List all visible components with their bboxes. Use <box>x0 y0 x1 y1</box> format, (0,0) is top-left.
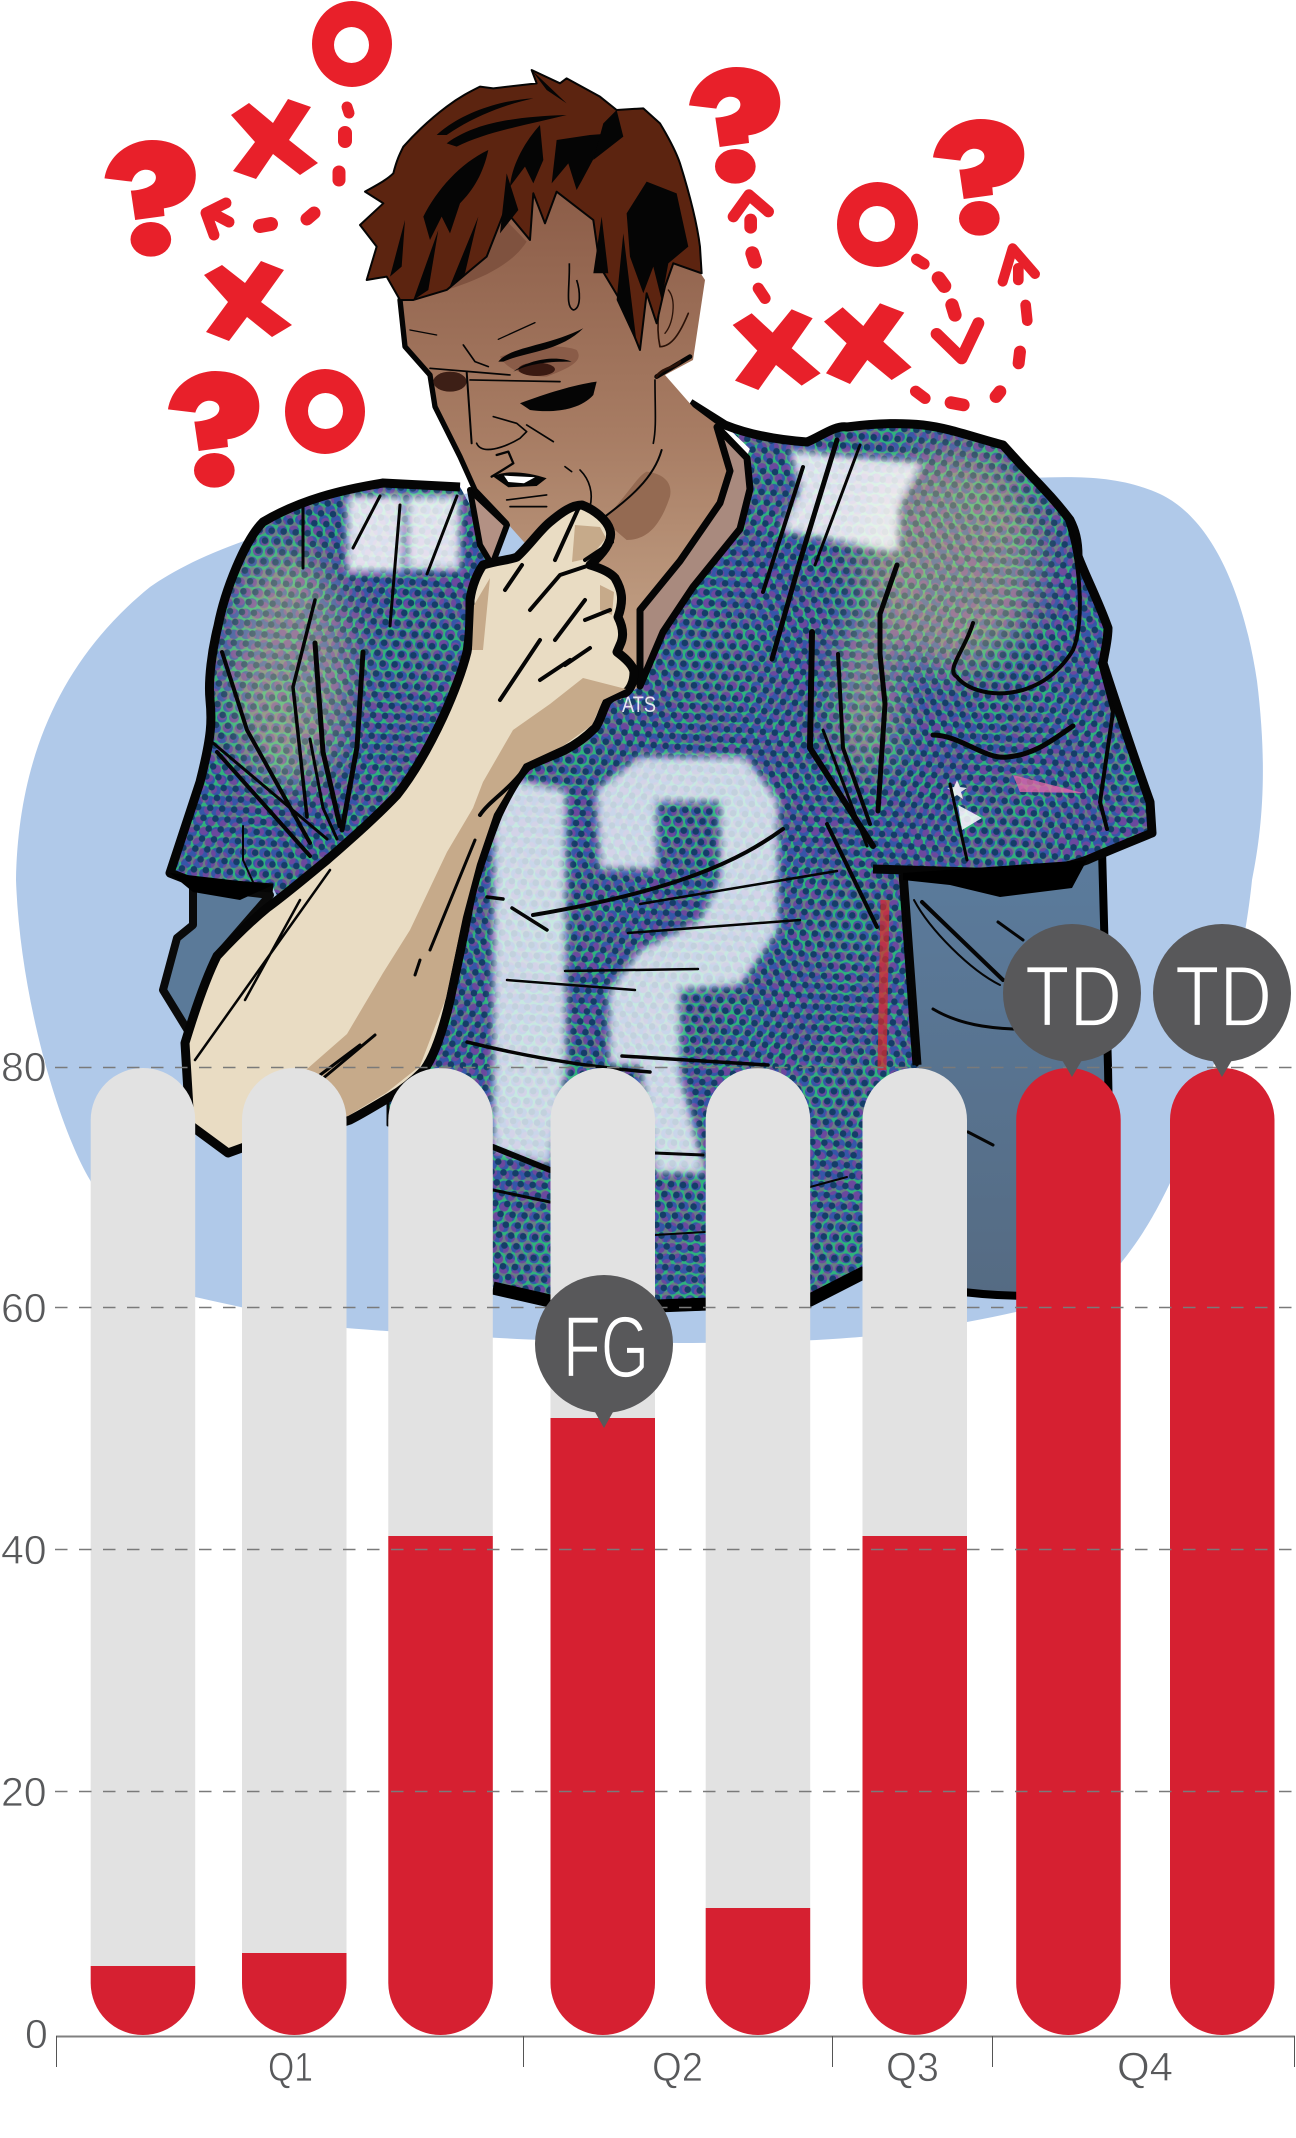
neck and face skin <box>400 120 750 700</box>
jersey number 12 <box>493 757 778 1173</box>
facial lines <box>410 323 662 517</box>
background: blue blob <box>16 477 1263 1343</box>
bar 3 <box>388 1068 493 2035</box>
bar 7 <box>1016 1068 1121 2035</box>
icon: circle O lower <box>285 369 365 454</box>
left playbook doodles <box>104 1 392 488</box>
shoulder numbers <box>347 450 923 572</box>
illustration: quarterback thinking <box>150 70 1170 1330</box>
label 20: 20 <box>1 1769 47 1815</box>
jersey fold lines <box>213 440 1113 1235</box>
sleeve logo <box>947 780 982 830</box>
teeth <box>504 476 535 483</box>
team wordmark: ATS <box>622 692 656 717</box>
fist highlights <box>472 525 614 650</box>
quarter labels <box>268 2044 1173 2090</box>
icon: question mark bottom <box>168 371 259 488</box>
head drawing <box>360 70 702 540</box>
arm shadow <box>243 678 626 1140</box>
forehead shadow <box>400 193 527 302</box>
face outline <box>400 300 507 523</box>
jersey collar left <box>470 490 507 565</box>
bar 8 <box>1170 1068 1274 2035</box>
label 0: 0 <box>25 2011 48 2057</box>
logo pink streak <box>1013 775 1083 793</box>
arm lines <box>195 505 612 1110</box>
icon: X left <box>733 309 821 390</box>
label Q2: Q2 <box>652 2044 703 2090</box>
icon: X lower <box>204 261 292 341</box>
label 60: 60 <box>1 1285 47 1331</box>
sweat drop <box>568 263 579 310</box>
callout: field goal <box>535 1275 673 1428</box>
bar 4 <box>550 1068 655 2035</box>
icon: question mark top <box>689 67 780 184</box>
right playbook doodles <box>689 67 1035 405</box>
eye shadow patch <box>500 347 579 377</box>
sleeve hem shadow <box>903 860 1087 897</box>
shoulder highlights <box>230 550 350 790</box>
bar 6 <box>862 1068 967 2035</box>
y-axis labels <box>1 1044 48 2057</box>
x-axis with quarter brackets <box>56 2036 1295 2090</box>
callout: touchdown 1: TD <box>1025 949 1122 1045</box>
brows and eyes <box>433 328 597 411</box>
callout: touchdown 2 <box>1153 924 1291 1077</box>
arrow: left dashed route <box>206 107 349 235</box>
hair <box>360 70 702 350</box>
side stripe <box>882 900 885 1070</box>
jersey collar right <box>640 427 750 686</box>
label 40: 40 <box>1 1527 47 1573</box>
bar 5 <box>706 1068 810 2035</box>
icon: circle O top <box>312 1 392 87</box>
arrow: right dashed routes <box>733 195 1035 405</box>
label Q3: Q3 <box>886 2044 939 2090</box>
icon: X upper <box>231 99 318 179</box>
y-axis gridlines <box>55 1068 1296 1792</box>
right undershirt sleeve <box>900 850 1112 1296</box>
callout: touchdown 1 <box>1003 924 1141 1077</box>
ear <box>657 273 688 377</box>
left undershirt sleeve <box>163 886 270 1034</box>
label Q1: Q1 <box>268 2044 313 2090</box>
bar 1 <box>91 1068 195 2035</box>
callout: field goal: FG <box>563 1299 649 1396</box>
neck shadow <box>603 472 670 540</box>
jersey outline <box>170 403 1152 1065</box>
hair shading <box>390 70 688 343</box>
mouth <box>493 472 547 487</box>
icon: question mark left <box>104 140 196 257</box>
label Q4: Q4 <box>1117 2044 1173 2090</box>
icon: question mark right <box>933 119 1024 236</box>
bar 2 <box>242 1068 346 2035</box>
jersey with halftone dots <box>150 400 1170 1330</box>
icon: X right <box>824 303 912 384</box>
icon: circle O <box>837 182 918 267</box>
callout: touchdown 2: TD <box>1175 949 1272 1045</box>
bar chart: points by possession <box>91 1068 1275 2035</box>
label 80: 80 <box>1 1044 47 1090</box>
undershirt fold lines <box>903 900 1023 1145</box>
jersey bottom hem <box>493 1272 865 1306</box>
forearm and fist <box>185 505 634 1153</box>
